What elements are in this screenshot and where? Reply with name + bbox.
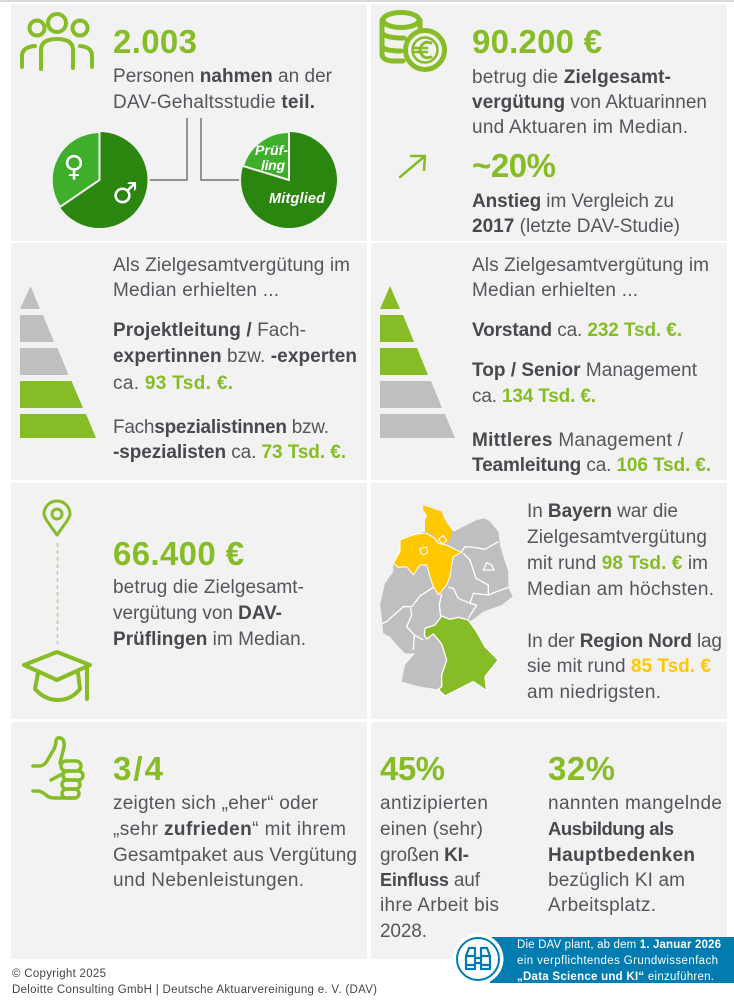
- AI influence text: [380, 793, 499, 942]
- pay text: vergütung von Aktuarinnen: [472, 92, 707, 113]
- icon: binoculars: [466, 948, 490, 969]
- AI concerns text: Hauptbedenken: [548, 845, 695, 866]
- expert level text: ca. 93 Tsd. €.: [113, 373, 233, 394]
- icon: thumbs up: [33, 738, 83, 798]
- region text: sie mit rund 85 Tsd. €: [527, 656, 711, 677]
- dashed path: [56, 543, 58, 644]
- management level text: Median erhielten ...: [472, 280, 638, 301]
- satisfaction number: 3/4: [113, 750, 164, 787]
- region text: In der Region Nord lag: [527, 631, 722, 652]
- satisfaction text: Gesamtpaket aus Vergütung: [113, 845, 357, 866]
- pyramid: expert levels: [20, 286, 96, 438]
- participants text: DAV-Gehaltsstudie teil.: [113, 92, 315, 113]
- AI concerns text: [548, 793, 722, 916]
- banner text: [517, 939, 721, 983]
- icon: coins: [382, 12, 444, 70]
- participants text: [113, 66, 333, 113]
- AI influence text: großen KI-: [380, 845, 469, 866]
- increase text: 2017 (letzte DAV-Studie): [472, 216, 680, 237]
- callout: data science banner: [452, 934, 734, 984]
- footer: copyright: Deloitte Consulting GmbH | Deutsche Aktuarvereinigung e. V. (DAV): [12, 984, 377, 996]
- panel: total pay: [371, 4, 727, 241]
- increase number: ~20%: [472, 147, 556, 184]
- panel: satisfaction: [11, 722, 367, 959]
- management level text: ca. 134 Tsd. €.: [472, 386, 596, 407]
- panel: regions: [371, 483, 727, 719]
- AI influence text: 2028.: [380, 921, 427, 942]
- AI concerns text: nannten mangelnde: [548, 793, 722, 814]
- footer: copyright: [12, 968, 377, 996]
- expert level text: Als Zielgesamtvergütung im: [113, 255, 350, 276]
- expert level text: Fachspezialistinnen bzw.: [113, 417, 329, 438]
- panel: pay by management level: [371, 243, 727, 480]
- AI influence text: einen (sehr): [380, 819, 483, 840]
- banner text: ein verpflichtendes Grundwissenfach: [517, 955, 718, 967]
- expert level text: Median erhielten ...: [113, 280, 279, 301]
- satisfaction text: zeigten sich „eher“ oder: [113, 793, 319, 814]
- region text: In Bayern war die: [527, 501, 678, 522]
- icon: rising arrow: [400, 156, 425, 177]
- region text: am niedrigsten.: [527, 682, 661, 703]
- pie chart: membership: Prüf-: [255, 142, 288, 158]
- examinee text: Prüflingen im Median.: [113, 629, 306, 650]
- examinee text: betrug die Zielgesamt-: [113, 577, 304, 598]
- AI concerns text: Arbeitsplatz.: [548, 895, 656, 916]
- panel: pay by expert level: [11, 243, 367, 480]
- examinee number: 66.400 €: [113, 535, 244, 572]
- pay text: betrug die Zielgesamt-: [472, 67, 671, 88]
- pay number: 90.200 €: [472, 23, 602, 60]
- AI concerns number: 32%: [548, 750, 615, 787]
- examinee text: [113, 577, 306, 650]
- examinee text: vergütung von DAV-: [113, 603, 282, 624]
- region text: mit rund 98 Tsd. € im: [527, 553, 708, 574]
- AI concerns text: Ausbildung als: [548, 818, 674, 839]
- increase text: Anstieg im Vergleich zu: [472, 191, 674, 212]
- management level text: Teamleitung ca. 106 Tsd. €.: [472, 455, 711, 476]
- management level text: Top / Senior Management: [472, 360, 698, 381]
- pie chart: membership: ling: [261, 157, 285, 173]
- pay text: [472, 67, 707, 138]
- management level text: Vorstand ca. 232 Tsd. €.: [472, 320, 682, 341]
- AI influence text: antizipierten: [380, 793, 488, 814]
- satisfaction text: „sehr zufrieden“ mit ihrem: [113, 819, 346, 840]
- panel: AI: [371, 722, 727, 959]
- management level text: [472, 255, 711, 476]
- expert level text: Projektleitung / Fach-: [113, 320, 306, 341]
- banner text: Die DAV plant, ab dem 1. Januar 2026: [517, 939, 721, 951]
- panel: examinees: [11, 483, 367, 719]
- banner text: „Data Science und KI“ einzuführen.: [517, 971, 714, 983]
- increase text: [472, 191, 680, 237]
- expert level text: expertinnen bzw. -experten: [113, 346, 357, 367]
- panel: participants: [11, 4, 367, 241]
- AI concerns text: bezüglich KI am: [548, 870, 685, 891]
- icon: people: [22, 14, 92, 69]
- AI influence text: Einfluss auf: [380, 870, 481, 891]
- region text: Zielgesamtvergütung: [527, 527, 707, 548]
- participants number: 2.003: [113, 23, 197, 60]
- management level text: Mittleres Management /: [472, 430, 684, 451]
- footer: copyright: © Copyright 2025: [12, 968, 106, 980]
- participants text: Personen nahmen an der: [113, 66, 333, 87]
- pie chart: membership: Mitglied: [269, 191, 326, 207]
- expert level text: [113, 255, 357, 463]
- region text: Median am höchsten.: [527, 579, 714, 600]
- icon: graduation cap: [24, 652, 90, 700]
- expert level text: -spezialisten ca. 73 Tsd. €.: [113, 442, 346, 463]
- pay text: und Aktuaren im Median.: [472, 117, 688, 138]
- icon: location pin: [44, 501, 70, 535]
- pie chart: gender: ♀: [63, 149, 85, 183]
- management level text: Als Zielgesamtvergütung im: [472, 255, 709, 276]
- region text: [527, 501, 722, 703]
- connector lines: [150, 118, 239, 180]
- satisfaction text: und Nebenleistungen.: [113, 870, 304, 891]
- pie chart: gender: ♂: [112, 176, 138, 210]
- AI influence text: ihre Arbeit bis: [380, 895, 499, 916]
- AI influence number: 45%: [380, 750, 445, 787]
- pyramid: management levels: [380, 286, 455, 438]
- pie chart: membership: [241, 132, 337, 228]
- satisfaction text: [113, 793, 357, 891]
- map: Germany: [380, 505, 513, 696]
- pie chart: gender: [52, 132, 148, 228]
